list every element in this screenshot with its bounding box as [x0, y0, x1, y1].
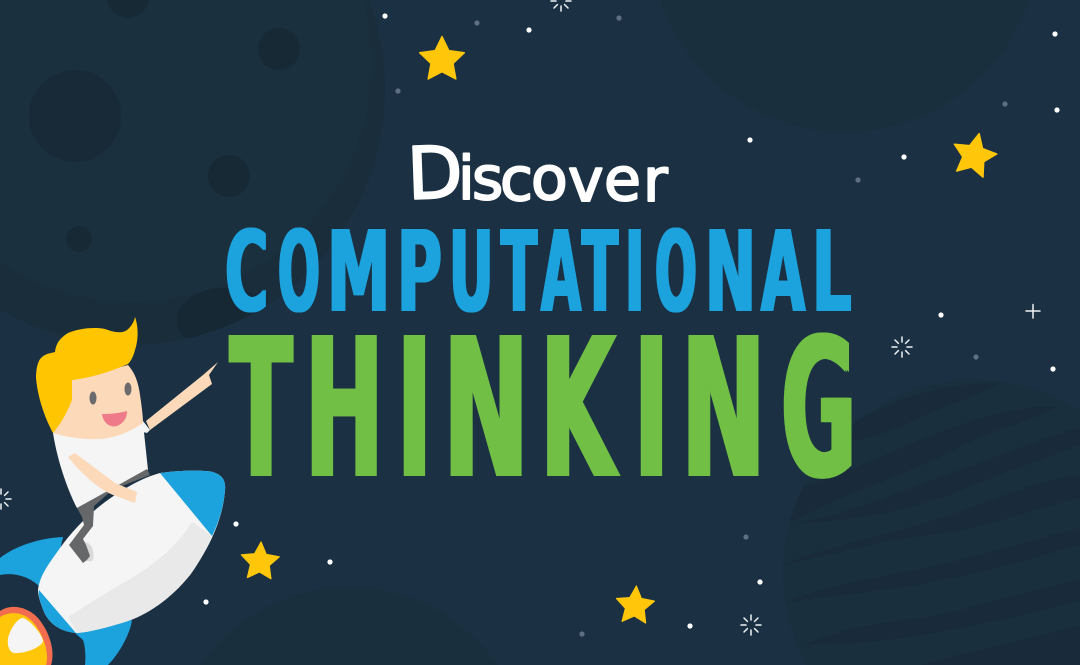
planet: bottom centre [200, 587, 498, 665]
heading: COMPUTATIONAL: A [541, 207, 581, 338]
rocket body [38, 471, 225, 633]
icon: yellow star, top [420, 36, 464, 79]
background stars: white and grey dots [203, 13, 1060, 637]
icon: yellow star, lower centre [615, 585, 655, 623]
icon: plus sparkle [1026, 304, 1040, 318]
heading: THINKING: I [634, 296, 669, 522]
heading: COMPUTATIONAL: M [327, 207, 391, 338]
heading: COMPUTATIONAL: L [812, 207, 851, 338]
heading: Discover: D [406, 130, 464, 216]
icon: sparkle, top [551, 0, 571, 11]
heading: COMPUTATIONAL: T [582, 207, 617, 338]
heading: COMPUTATIONAL: P [397, 207, 442, 338]
heading: THINKING [228, 296, 856, 522]
heading: COMPUTATIONAL [225, 207, 852, 338]
heading: COMPUTATIONAL: U [449, 207, 493, 338]
heading: THINKING: K [540, 296, 616, 522]
planet: cratered moon, top left [0, 0, 385, 352]
heading: THINKING: N [443, 296, 530, 522]
heading: Discover: iscover [458, 144, 668, 216]
heading: THINKING: N [681, 296, 765, 522]
heading: COMPUTATIONAL: I [625, 207, 645, 338]
icon: yellow star, lower left [240, 541, 280, 579]
icon: yellow star, right [949, 129, 1000, 179]
rocket fin, lower [75, 620, 132, 665]
illustration: boy riding rocket [0, 317, 225, 665]
icon: sparkle, left edge [0, 489, 11, 509]
boy: shirt [53, 423, 148, 508]
heading: COMPUTATIONAL: A [761, 207, 805, 338]
icon: sparkle, bottom [741, 615, 761, 635]
heading: THINKING: H [305, 296, 384, 522]
boy: face [53, 365, 143, 439]
rocket fin, upper [0, 537, 63, 587]
boy: yellow hair [36, 317, 138, 433]
heading: THINKING: G [781, 296, 856, 522]
heading: COMPUTATIONAL: O [655, 207, 696, 338]
rocket flame [0, 607, 53, 665]
boy: resting arm [68, 453, 137, 503]
boy: trousers and belt [69, 469, 150, 563]
boy: sleeve [143, 421, 150, 433]
heading: COMPUTATIONAL: O [278, 207, 319, 338]
planet: top right [660, 0, 1030, 132]
planet: striped, bottom right [783, 380, 1080, 665]
heading: COMPUTATIONAL: C [225, 207, 268, 338]
heading: COMPUTATIONAL: N [705, 207, 756, 338]
heading: THINKING: I [397, 296, 432, 522]
heading: THINKING: T [230, 296, 293, 522]
boy: pointing arm [146, 362, 218, 430]
icon: sparkle, right [892, 337, 912, 357]
heading: COMPUTATIONAL: T [500, 207, 536, 338]
